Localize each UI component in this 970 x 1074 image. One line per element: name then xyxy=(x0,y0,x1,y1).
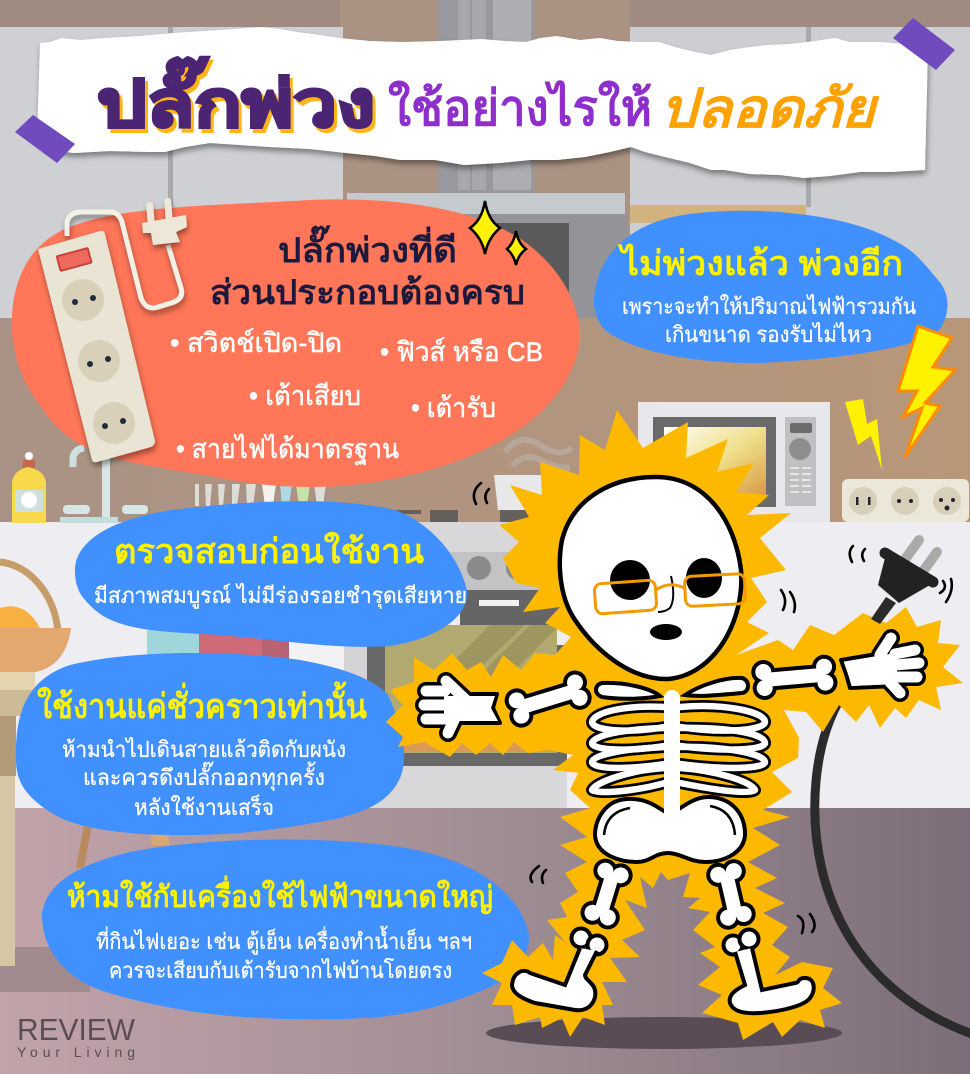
sternum xyxy=(664,690,680,823)
title paper xyxy=(15,18,955,178)
tape left xyxy=(15,115,75,163)
title text xyxy=(97,57,880,144)
heading: ส่วนประกอบต้องครบ xyxy=(210,274,525,312)
soap bottle xyxy=(12,452,46,523)
bullet list: • เต้ารับ xyxy=(411,393,496,423)
panel: do not daisy-chain xyxy=(594,211,947,363)
icon: power strip xyxy=(38,198,187,462)
bullet list: • ฟิวส์ หรือ CB xyxy=(380,336,543,367)
title text: ปลอดภัย xyxy=(660,79,880,139)
skeleton xyxy=(424,477,919,1013)
towel xyxy=(147,630,367,690)
heading xyxy=(210,225,525,312)
pot and steam xyxy=(494,440,572,510)
heading: ปลั๊กพ่วงที่ดี xyxy=(278,225,457,270)
wall sockets xyxy=(842,479,969,522)
panel: temporary use only: ห้ามนำไปเดินสายแล้วติดกับผนัง xyxy=(62,737,346,762)
panel: no large appliances xyxy=(42,840,529,1019)
icon: sparkles xyxy=(470,201,526,265)
bullet list xyxy=(170,327,543,465)
panel: temporary use only xyxy=(16,653,404,835)
title text: ใช้อย่างไรให้ xyxy=(388,79,652,136)
foot right xyxy=(724,930,814,1013)
panel: do not daisy-chain: เพราะจะทำให้ปริมาณไฟฟ้ารวมกัน xyxy=(622,294,916,319)
hip creases xyxy=(604,806,735,835)
panel: no large appliances: ห้ามใช้กับเครื่องใช้ไฟฟ้าขนาดใหญ่ xyxy=(67,875,493,915)
collar bones xyxy=(596,678,748,699)
foot left xyxy=(512,928,606,1010)
vibration marks xyxy=(474,483,952,933)
bullet list: • เต้าเสียบ xyxy=(249,381,361,411)
power cord xyxy=(815,703,970,1035)
microwave xyxy=(638,402,830,522)
panel: do not daisy-chain: ไม่พ่วงแล้ว พ่วงอีก xyxy=(618,243,903,283)
title text: ปลั๊กพ่วง xyxy=(97,57,375,140)
pelvis xyxy=(595,797,745,862)
icon: plug xyxy=(871,540,937,624)
logo: REVIEW xyxy=(17,1012,136,1047)
arm bone left xyxy=(502,668,595,731)
thigh right xyxy=(704,857,758,932)
head xyxy=(560,477,741,679)
panel: temporary use only: หลังใช้งานเสร็จ xyxy=(134,793,274,820)
thigh left xyxy=(578,856,636,932)
panel: check before use: มีสภาพสมบูรณ์ ไม่มีร่องรอยชำรุดเสียหาย xyxy=(94,583,467,609)
bullet list: • สวิตช์เปิด-ปิด xyxy=(170,327,342,358)
panel: good power strip xyxy=(12,198,580,487)
electric burst xyxy=(386,410,963,1040)
faucet xyxy=(60,448,148,523)
panel: check before use xyxy=(75,501,467,647)
basket and table xyxy=(0,562,170,966)
panel: no large appliances: ควรจะเสียบกับเต้ารับจากไฟบ้านโดยตรง xyxy=(109,958,452,983)
panel: temporary use only: และควรดึงปลั๊กออกทุกครั้ง xyxy=(83,761,325,791)
panel: do not daisy-chain: เกินขนาด รองรับไม่ไหว xyxy=(665,322,872,347)
arm bone right xyxy=(750,654,838,701)
panel: temporary use only: ใช้งานแค่ชั่วคราวเท่านั้น xyxy=(37,681,367,726)
ribs xyxy=(592,706,765,792)
logo: Your Living xyxy=(17,1044,135,1060)
hand left xyxy=(424,681,500,733)
tape right xyxy=(893,18,955,70)
floor shadow xyxy=(486,1017,842,1049)
stove xyxy=(367,510,570,808)
face xyxy=(594,558,746,640)
bullet list: • สายไฟได้มาตรฐาน xyxy=(176,434,399,465)
hand right xyxy=(841,638,919,693)
dish rack xyxy=(195,484,330,506)
icon: lightning bolts xyxy=(845,326,955,470)
panel: check before use: ตรวจสอบก่อนใช้งาน xyxy=(114,531,424,571)
panel: no large appliances: ที่กินไฟเยอะ เช่น ตู้เย็น เครื่องทำน้ำเย็น ฯลฯ xyxy=(96,926,472,955)
title text: ปลั๊กพ่วง xyxy=(100,61,378,144)
